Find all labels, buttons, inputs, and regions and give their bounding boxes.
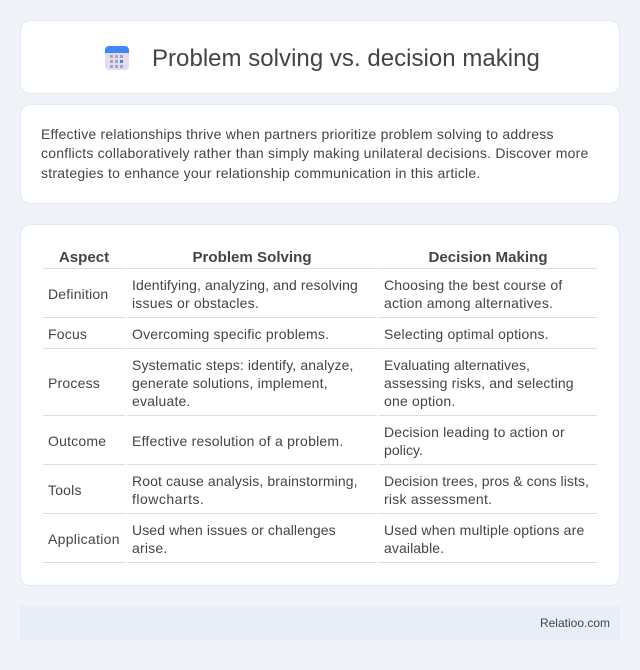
row: Tools: Decision trees, pros & cons lists, bbox=[384, 473, 589, 489]
row: Tools: Tools bbox=[48, 482, 82, 498]
row: Definition: Definition bbox=[48, 286, 108, 302]
panel: introduction bbox=[20, 104, 620, 204]
row: Focus: Focus bbox=[48, 326, 87, 342]
row: Tools: flowcharts. bbox=[132, 491, 204, 507]
row: Application: Used when issues or challenges bbox=[132, 522, 336, 538]
row: Application: Used when multiple options are bbox=[384, 522, 584, 538]
row: Definition: Choosing the best course of bbox=[384, 277, 562, 293]
row: Focus: Overcoming specific problems. bbox=[132, 326, 329, 342]
intro text: conflicts collaboratively rather than simply making unilateral decisions. Discover more bbox=[41, 145, 588, 161]
row: Process bbox=[48, 357, 574, 409]
comparison table bbox=[43, 249, 597, 563]
row: Process: Systematic steps: identify, analyze, bbox=[132, 357, 354, 373]
footer bbox=[20, 606, 620, 640]
row: Application: available. bbox=[384, 540, 444, 556]
row: Process: evaluate. bbox=[132, 393, 191, 409]
footer brand: Relatioo.com bbox=[540, 616, 610, 630]
row: Process: Evaluating alternatives, bbox=[384, 357, 530, 373]
row: Process: one option. bbox=[384, 393, 455, 409]
row: Outcome: Decision leading to action or bbox=[384, 424, 565, 440]
panel: comparison table bbox=[20, 224, 620, 586]
row: Tools bbox=[48, 473, 589, 507]
row: Definition: issues or obstacles. bbox=[132, 295, 259, 311]
row: Focus bbox=[48, 326, 549, 342]
row: Process: Process bbox=[48, 375, 100, 391]
panel: title card bbox=[20, 20, 620, 94]
table header bbox=[59, 249, 548, 266]
row: Definition: action among alternatives. bbox=[384, 295, 553, 311]
title: Problem solving vs. decision making bbox=[152, 45, 540, 72]
row: Process: assessing risks, and selecting bbox=[384, 375, 574, 391]
table header: Problem Solving bbox=[192, 249, 312, 266]
table header: Aspect bbox=[59, 249, 109, 266]
row: Tools: Root cause analysis, brainstorming, bbox=[132, 473, 358, 489]
intro text bbox=[41, 126, 588, 181]
row: Process: generate solutions, implement, bbox=[132, 375, 328, 391]
row: Application: arise. bbox=[132, 540, 167, 556]
intro text: Effective relationships thrive when partners prioritize problem solving to address bbox=[41, 126, 554, 142]
row: Definition bbox=[48, 277, 562, 311]
row: Outcome: policy. bbox=[384, 442, 423, 458]
row: Application: Application bbox=[48, 531, 120, 547]
icon: calendar bbox=[105, 46, 129, 70]
row: Application bbox=[48, 522, 584, 556]
row: Focus: Selecting optimal options. bbox=[384, 326, 549, 342]
row: Outcome: Effective resolution of a problem. bbox=[132, 433, 343, 449]
row: Outcome bbox=[48, 424, 565, 458]
intro text: strategies to enhance your relationship communication in this article. bbox=[41, 165, 481, 181]
table header: Decision Making bbox=[428, 249, 548, 266]
row: Tools: risk assessment. bbox=[384, 491, 492, 507]
row: Outcome: Outcome bbox=[48, 433, 106, 449]
row: Definition: Identifying, analyzing, and resolving bbox=[132, 277, 358, 293]
